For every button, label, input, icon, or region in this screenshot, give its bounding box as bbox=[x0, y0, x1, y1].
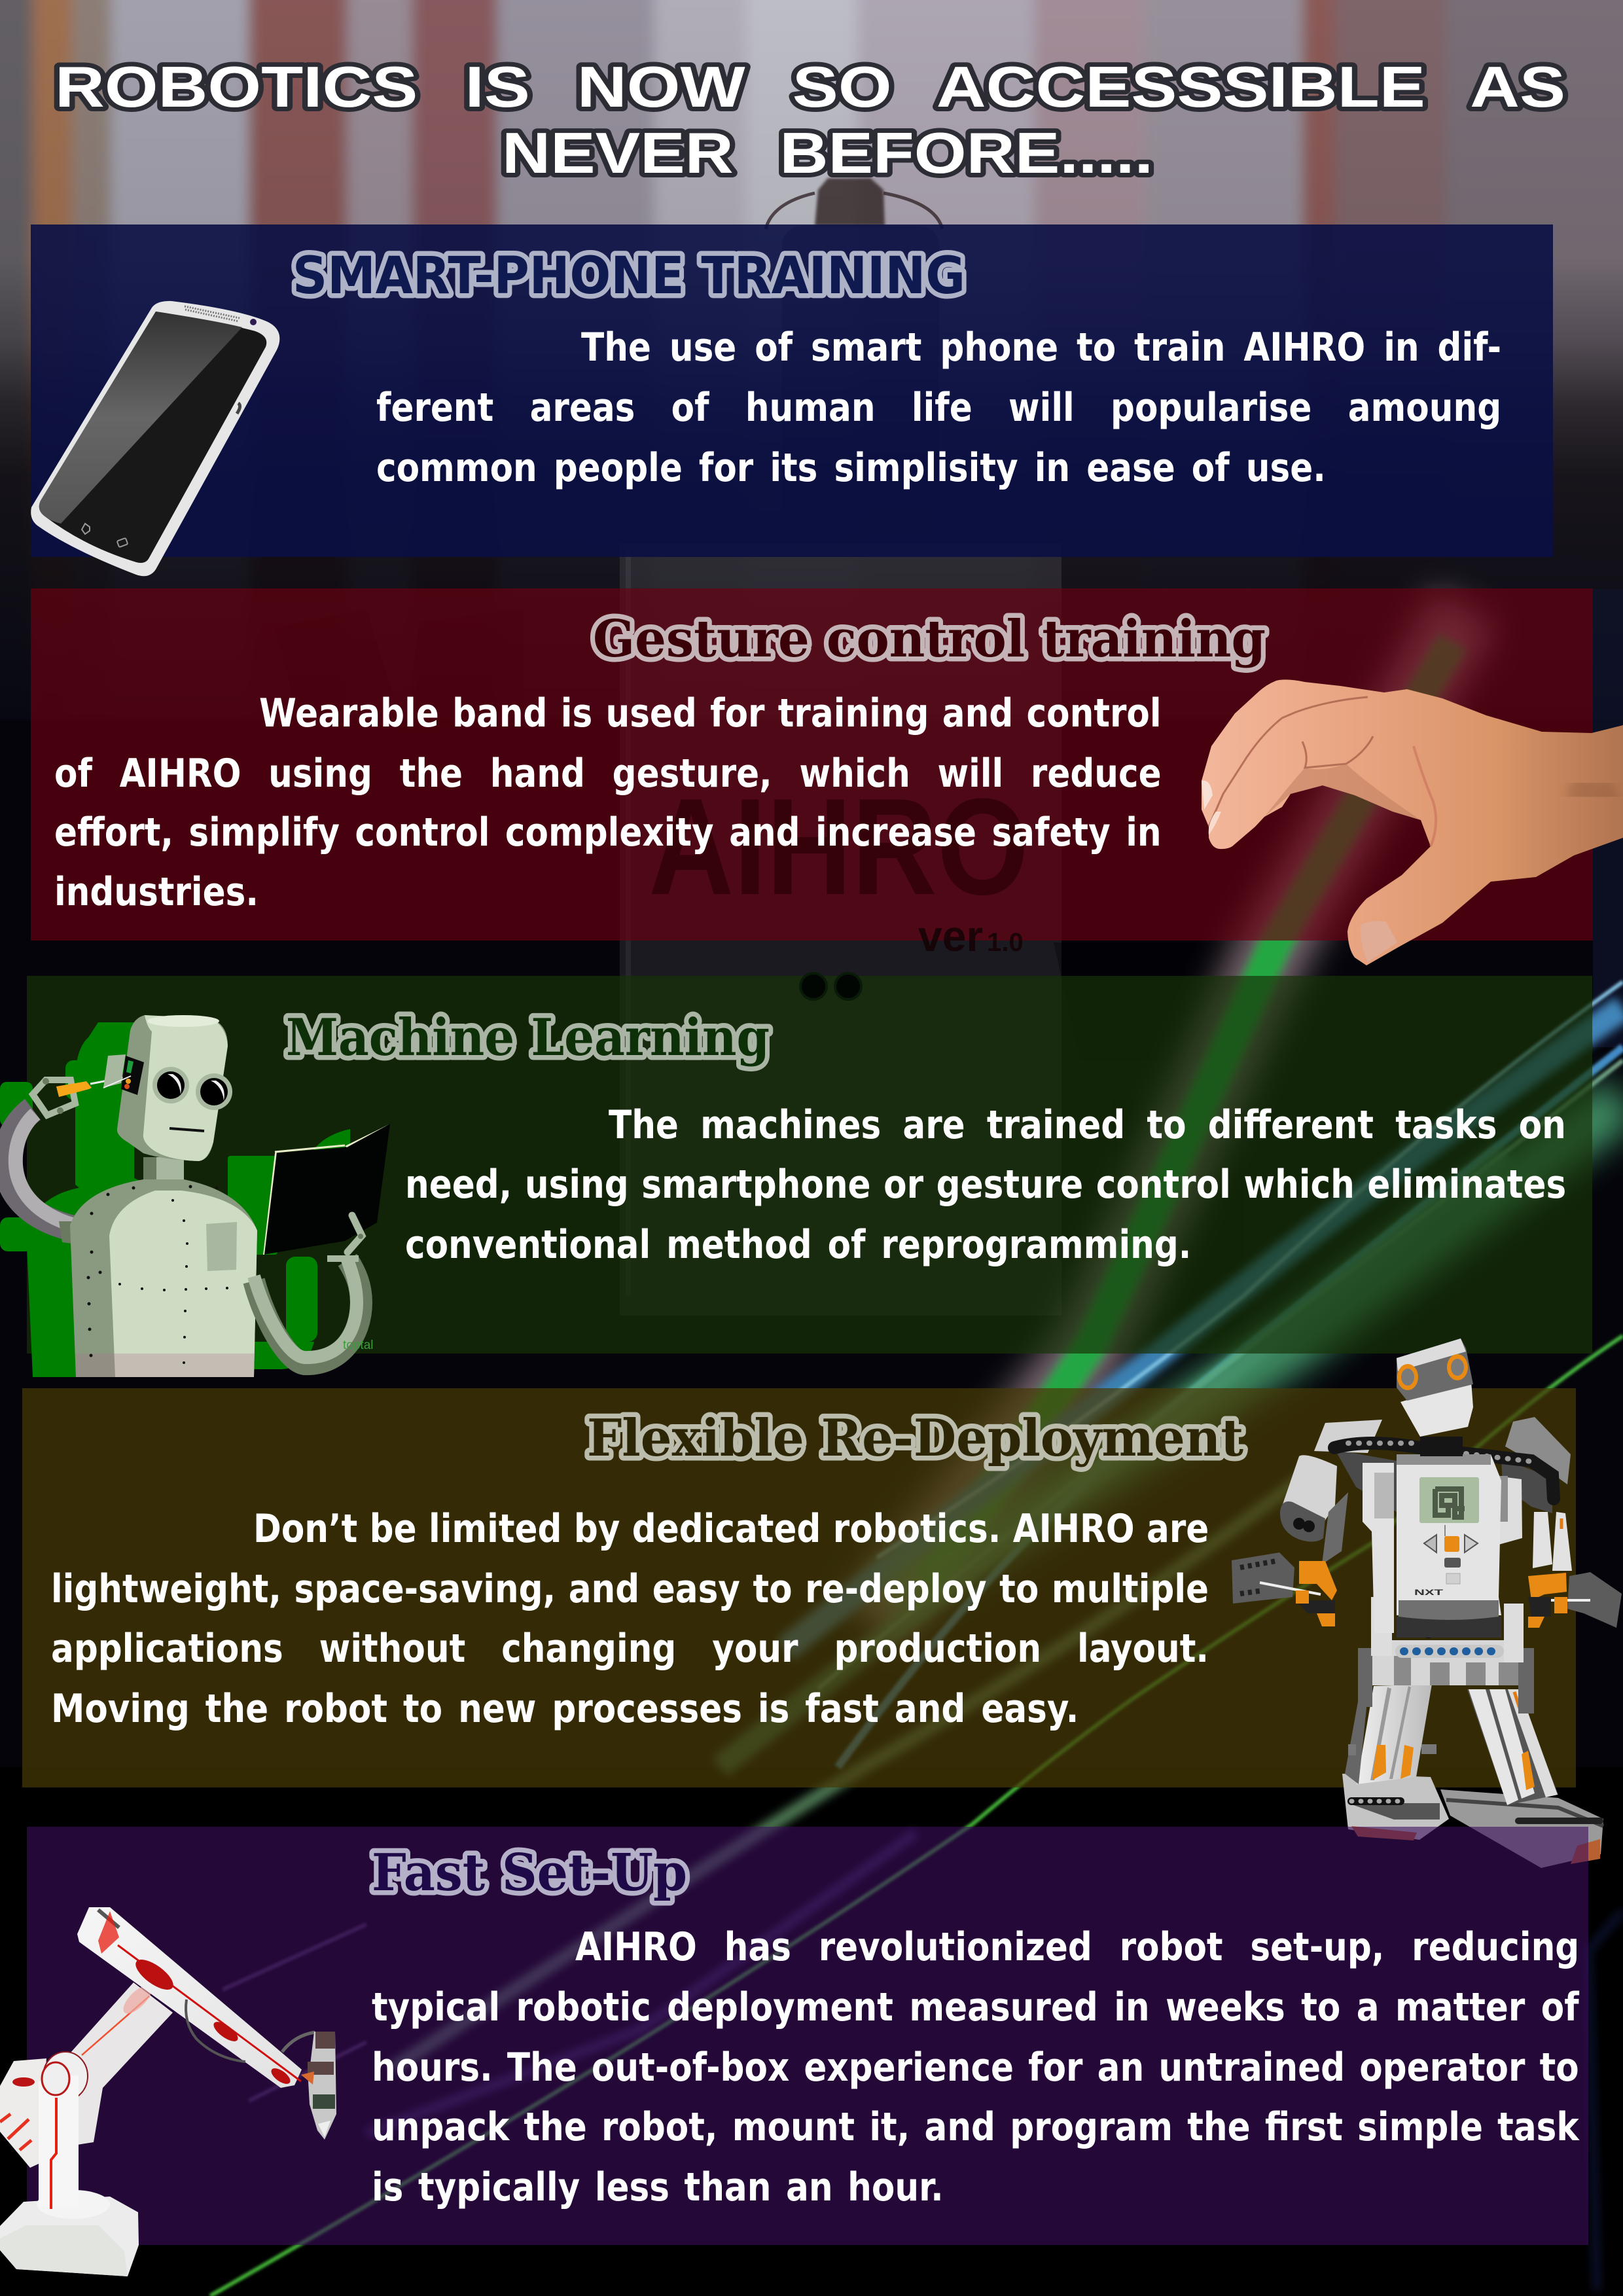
icon: hand bbox=[1202, 679, 1623, 965]
text block: gesture control training: industries. bbox=[54, 869, 259, 915]
background text: ver 1.0: ver1.0 bbox=[918, 912, 1024, 960]
text block: smart-phone training bbox=[376, 325, 1501, 491]
illustration: white robot arm bbox=[0, 1907, 336, 2276]
text block: gesture control training bbox=[54, 691, 1162, 915]
heading: gesture control training: Gesture control training bbox=[593, 609, 1266, 669]
NXT brick bbox=[1397, 1454, 1501, 1615]
text block: flexible re-deployment: applications without changing your production layout. bbox=[51, 1626, 1209, 1672]
head bbox=[117, 1015, 228, 1161]
text block: flexible re-deployment: Moving the robot to new processes is fast and easy. bbox=[51, 1686, 1079, 1732]
mouth bbox=[169, 1128, 204, 1131]
title bbox=[55, 54, 1565, 185]
title: NEVER BEFORE..... bbox=[502, 120, 1153, 185]
heading: machine learning: Machine Learning bbox=[286, 1008, 770, 1067]
shoulder backing bbox=[1335, 1450, 1552, 1513]
wires bbox=[1414, 1613, 1482, 1636]
shoulder beams bbox=[1314, 1420, 1382, 1453]
text block: machine learning bbox=[405, 1102, 1566, 1268]
text block: gesture control training: Wearable band is used for training and control bbox=[259, 691, 1162, 736]
toptal mark: toptal bbox=[343, 1338, 373, 1352]
feet bbox=[1440, 1789, 1603, 1868]
illustration: robot reading a book bbox=[0, 1015, 390, 1380]
robot hand bbox=[327, 1255, 359, 1262]
text block: smart-phone training: ferent areas of human life will popularise amoung bbox=[376, 385, 1501, 431]
panel: machine learning bbox=[27, 976, 1592, 1354]
text block: machine learning: The machines are trained to different tasks on bbox=[609, 1102, 1566, 1148]
text block: gesture control training: of AIHRO using the hand gesture, which will reduce bbox=[54, 751, 1162, 797]
head bbox=[1420, 1437, 1463, 1456]
eyes bbox=[152, 1067, 189, 1103]
text block: flexible re-deployment: Don’t be limited by dedicated robotics. AIHRO are bbox=[253, 1506, 1209, 1552]
text block: gesture control training: effort, simplify control complexity and increase safety in bbox=[54, 810, 1162, 855]
right arm and claw bbox=[1533, 1512, 1572, 1571]
text block: fast set-up: hours. The out-of-box experience for an untrained operator to bbox=[372, 2045, 1579, 2090]
background: robot eye lights bbox=[800, 973, 861, 999]
text block: flexible re-deployment bbox=[51, 1506, 1209, 1732]
text block: fast set-up: typical robotic deployment measured in weeks to a matter of bbox=[372, 1984, 1579, 2030]
illustration: lego mindstorms robot bbox=[1232, 1338, 1622, 1868]
title: ROBOTICS IS NOW SO ACCESSSIBLE AS bbox=[55, 54, 1565, 119]
illustration: lego mindstorms robot: NXT bbox=[1414, 1588, 1444, 1597]
shoulder joint bbox=[43, 2052, 88, 2100]
background: aurora light streaks bbox=[210, 609, 1623, 2296]
text block: fast set-up bbox=[372, 1924, 1580, 2210]
icon: smartphone bbox=[31, 301, 279, 576]
claw and screwdriver bbox=[33, 1080, 75, 1115]
text block: flexible re-deployment: lightweight, space-saving, and easy to re-deploy to multiple bbox=[51, 1566, 1209, 1612]
panel: fast set-up bbox=[27, 1827, 1588, 2245]
text block: smart-phone training: common people for its simplisity in ease of use. bbox=[376, 445, 1326, 491]
panel: flexible re-deployment bbox=[22, 1388, 1576, 1787]
left motor bbox=[1280, 1455, 1337, 1525]
head side panel bbox=[121, 1056, 144, 1095]
left claw bbox=[1232, 1552, 1294, 1604]
text block: machine learning: conventional method of reprogramming. bbox=[405, 1222, 1191, 1268]
torso bbox=[70, 1179, 257, 1377]
panel: gesture control training bbox=[31, 588, 1593, 941]
text block: fast set-up: unpack the robot, mount it, and program the first simple task bbox=[372, 2104, 1579, 2150]
rivets bbox=[86, 1185, 249, 1364]
right arm bbox=[254, 1260, 361, 1364]
heading: flexible re-deployment: Flexible Re-Deployment bbox=[587, 1408, 1243, 1468]
blue-holed beam bbox=[1402, 1645, 1497, 1658]
book bbox=[263, 1124, 390, 1255]
panel: smart-phone training bbox=[31, 224, 1553, 557]
hips bbox=[1371, 1640, 1522, 1685]
side panels bbox=[1363, 1463, 1394, 1633]
legs bbox=[1357, 1684, 1432, 1784]
background text: AIHRO label on robot: AIHRO bbox=[649, 770, 1029, 924]
left arm bbox=[7, 1109, 85, 1230]
circuit board backdrop bbox=[0, 1022, 350, 1377]
text block: fast set-up: is typically less than an hour. bbox=[372, 2164, 944, 2210]
text block: fast set-up: AIHRO has revolutionized robot set-up, reducing bbox=[575, 1924, 1579, 1970]
text block: machine learning: need, using smartphone or gesture control which eliminates bbox=[405, 1162, 1566, 1208]
heading: fast set-up: Fast Set-Up bbox=[372, 1843, 687, 1903]
text block: smart-phone training: The use of smart phone to train AIHRO in dif- bbox=[581, 325, 1501, 370]
neck bbox=[143, 1157, 184, 1191]
heading: smart-phone training: SMART-PHONE TRAINING bbox=[293, 247, 965, 306]
